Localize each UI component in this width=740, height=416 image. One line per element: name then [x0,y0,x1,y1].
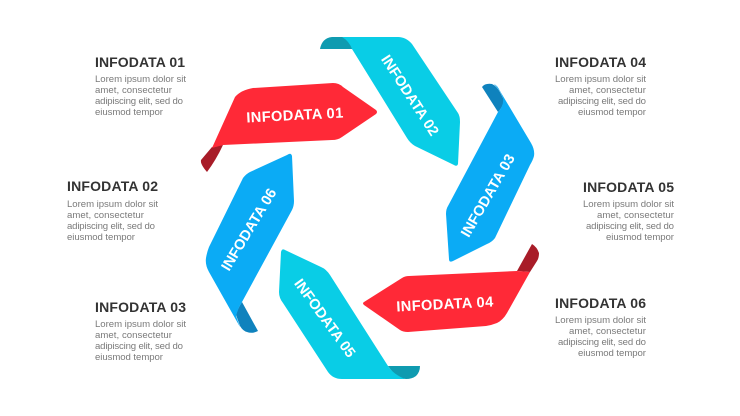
text block: left infodata 02: INFODATA 02 [67,178,158,194]
text block: left infodata 02: eiusmod tempor [67,232,136,243]
text block: left infodata 02: Lorem ipsum dolor sit [67,199,158,210]
label: infodata 03: INFODATA 03 [458,152,519,240]
label: infodata 01: INFODATA 01 [246,105,344,127]
label: infodata 04: INFODATA 04 [396,294,495,316]
text block: left infodata 01: adipiscing elit, sed do [95,96,183,107]
text block: left infodata 03: Lorem ipsum dolor sit [95,319,186,330]
text block: right infodata 06: INFODATA 06 [555,295,646,311]
text block: right infodata 04 [555,54,647,118]
text block: left infodata 02: adipiscing elit, sed do [67,221,155,232]
text block: left infodata 01: INFODATA 01 [95,54,185,70]
ribbon: infodata 05 (cyan) [279,249,420,379]
text block: left infodata 03 [95,299,186,363]
text block: left infodata 01: eiusmod tempor [95,107,164,118]
text block: right infodata 05: amet, consectetur [597,210,675,221]
text block: left infodata 01 [95,54,186,118]
text block: left infodata 03: adipiscing elit, sed do [95,341,183,352]
ribbon: infodata 03 (blue) [446,84,534,262]
text block: left infodata 01: amet, consectetur [95,85,173,96]
text block: right infodata 06: amet, consectetur [569,326,647,337]
text block: right infodata 05: Lorem ipsum dolor sit [583,199,674,210]
text block: right infodata 06 [555,295,647,359]
text block: left infodata 02: amet, consectetur [67,210,145,221]
text block: left infodata 03: eiusmod tempor [95,352,164,363]
label: infodata 06: INFODATA 06 [219,186,280,274]
label: infodata 05: INFODATA 05 [290,276,358,361]
text block: right infodata 05: eiusmod tempor [606,232,675,243]
ribbon: infodata 06 (blue) [206,154,294,333]
text block: left infodata 03: INFODATA 03 [95,299,186,315]
text block: right infodata 05: INFODATA 05 [583,179,674,195]
label: infodata 02: INFODATA 02 [377,52,441,139]
ribbon: infodata 04 (red) [363,244,539,332]
ribbon: infodata 01 (red) [201,83,377,172]
text block: left infodata 01: Lorem ipsum dolor sit [95,74,186,85]
text block: right infodata 06: adipiscing elit, sed do [558,337,646,348]
text block: right infodata 06: Lorem ipsum dolor sit [555,315,646,326]
text block: right infodata 05 [583,179,675,243]
text block: right infodata 04: eiusmod tempor [578,107,647,118]
text block: right infodata 06: eiusmod tempor [578,348,647,359]
ribbon: infodata 02 (cyan) [320,37,460,166]
text block: right infodata 04: Lorem ipsum dolor sit [555,74,646,85]
text block: right infodata 05: adipiscing elit, sed do [586,221,674,232]
text block: right infodata 04: INFODATA 04 [555,54,646,70]
text block: left infodata 03: amet, consectetur [95,330,173,341]
text block: right infodata 04: amet, consectetur [569,85,647,96]
text block: right infodata 04: adipiscing elit, sed do [558,96,646,107]
text block: left infodata 02 [67,178,158,243]
